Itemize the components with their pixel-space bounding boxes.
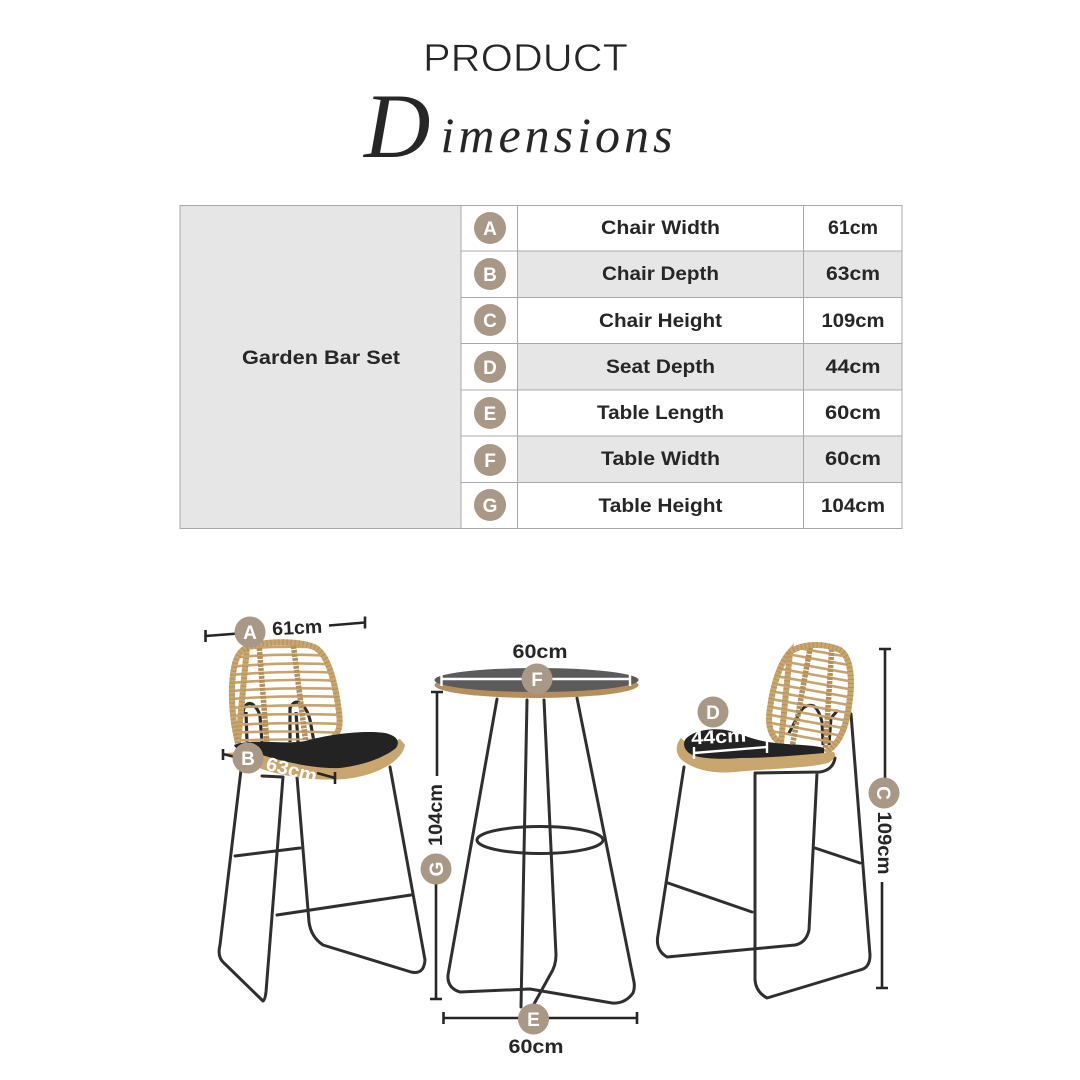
table legs bbox=[448, 698, 634, 1007]
dimension B: chair depth: 63cm bbox=[264, 754, 319, 788]
seat cushion bbox=[684, 729, 824, 759]
dimension D: seat depth: D bbox=[706, 703, 720, 724]
dimension G: table height bbox=[420, 692, 452, 999]
dimension F: table width bbox=[441, 642, 630, 694]
dimension C: chair height: 109cm bbox=[873, 812, 894, 874]
dimension D: seat depth bbox=[691, 696, 767, 759]
seat cushion bbox=[234, 732, 398, 768]
chair legs and frame bbox=[657, 714, 870, 998]
title bbox=[362, 37, 676, 177]
row G: table height: 104cm bbox=[821, 496, 885, 517]
table grid bbox=[461, 206, 902, 528]
dimension B: chair depth bbox=[223, 742, 335, 788]
row D: seat depth bbox=[474, 351, 880, 383]
row E: table length bbox=[474, 397, 881, 429]
heading: PRODUCT: PRODUCT bbox=[423, 37, 628, 80]
dimension D: seat depth: 44cm bbox=[691, 726, 747, 749]
dimensions table bbox=[180, 206, 902, 528]
wicker backrest bbox=[230, 642, 345, 744]
row F: table width: 60cm bbox=[825, 449, 881, 470]
row G: table height bbox=[474, 489, 885, 521]
dimension B: chair depth: B bbox=[241, 749, 255, 770]
dark glass tabletop bbox=[434, 668, 638, 692]
dimension E: table length: E bbox=[527, 1010, 540, 1031]
dimension E: table length: 60cm bbox=[508, 1037, 564, 1058]
row D: seat depth: D bbox=[483, 358, 497, 379]
dimension F: table width: 60cm bbox=[512, 642, 568, 663]
dimension A: chair width: 61cm bbox=[272, 617, 323, 640]
heading: Dimensions script: imensions bbox=[440, 107, 676, 163]
dimension F: table width: F bbox=[531, 670, 543, 691]
footrest ring bbox=[477, 826, 603, 854]
wicker table rim bbox=[434, 672, 638, 698]
panel: product name cell: Garden Bar Set bbox=[242, 348, 401, 369]
right bar chair illustration bbox=[657, 643, 870, 998]
row B: chair depth: 63cm bbox=[826, 264, 880, 285]
row C: chair height: 109cm bbox=[822, 311, 884, 332]
dimension A: chair width: A bbox=[243, 623, 257, 644]
row B: chair depth bbox=[474, 258, 880, 290]
row G: table height: G bbox=[483, 496, 497, 517]
heading: Dimensions script: D bbox=[362, 75, 434, 177]
row D: seat depth: 44cm bbox=[826, 357, 880, 378]
row F: table width: F bbox=[484, 451, 496, 472]
row A: chair width bbox=[474, 212, 878, 244]
dimension C: chair height: C bbox=[872, 786, 893, 800]
row E: table length: Table Length bbox=[597, 403, 724, 424]
row A: chair width: 61cm bbox=[828, 218, 878, 239]
row A: chair width: A bbox=[483, 219, 497, 240]
wicker backrest bbox=[765, 643, 860, 755]
dimension G: table height: 104cm bbox=[426, 784, 447, 846]
chair legs and frame bbox=[219, 767, 425, 1001]
row B: chair depth: B bbox=[483, 265, 497, 286]
row B: chair depth: Chair Depth bbox=[602, 264, 719, 285]
dimension E: table length bbox=[443, 1004, 637, 1058]
row F: table width: Table Width bbox=[601, 449, 720, 470]
row E: table length: 60cm bbox=[825, 403, 881, 424]
left bar chair illustration bbox=[219, 642, 425, 1001]
row E: table length: E bbox=[484, 404, 496, 425]
row C: chair height bbox=[474, 304, 884, 336]
dimension A: chair width bbox=[206, 616, 365, 648]
panel: product name cell bbox=[180, 206, 461, 528]
row C: chair height: Chair Height bbox=[599, 311, 723, 332]
round bar table illustration bbox=[434, 668, 638, 1007]
row D: seat depth: Seat Depth bbox=[606, 357, 715, 378]
row A: chair width: Chair Width bbox=[601, 218, 720, 239]
wicker seat bbox=[226, 739, 405, 780]
row C: chair height: C bbox=[483, 311, 497, 332]
wicker seat bbox=[677, 738, 835, 773]
dimension G: table height: G bbox=[427, 862, 448, 876]
row F: table width bbox=[474, 444, 881, 476]
dimension C: chair height bbox=[868, 649, 900, 988]
row G: table height: Table Height bbox=[598, 496, 723, 517]
